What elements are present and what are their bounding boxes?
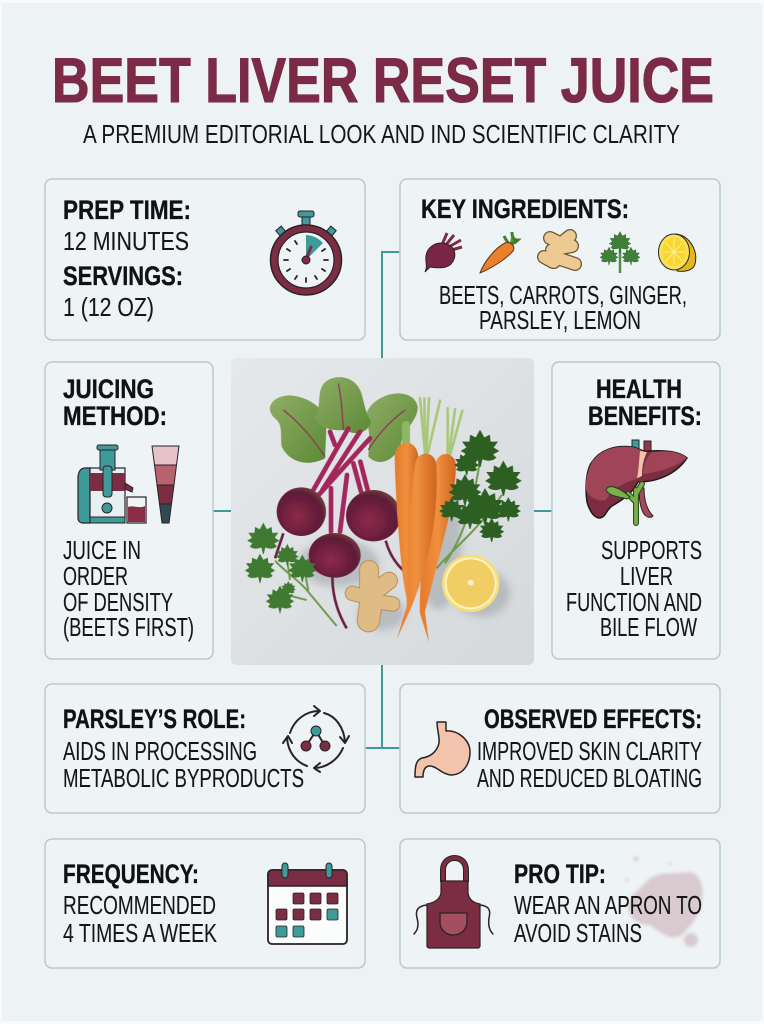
heading: key ingredients: KEY INGREDIENTS: — [421, 194, 629, 224]
ginger — [352, 570, 393, 621]
icon: stomach — [415, 722, 470, 777]
heading: parsley's role: PARSLEY’S ROLE: — [63, 704, 246, 734]
text: wear an apron: AVOID STAINS — [514, 918, 642, 948]
heading: servings: SERVINGS: — [63, 261, 183, 291]
icon: density cone — [152, 446, 179, 523]
text: supports liver function: LIVER — [620, 561, 673, 591]
text: 1 (12 oz): 1 (12 OZ) — [63, 292, 154, 322]
central ingredient photo — [231, 358, 534, 665]
text: recommended 4 times a week — [63, 890, 217, 948]
panel: health benefits — [552, 362, 720, 659]
panel: observed effects — [400, 684, 720, 813]
connector lines — [213, 252, 552, 748]
carrots — [395, 443, 456, 643]
panel: key ingredients — [400, 179, 720, 340]
icon: stopwatch — [270, 211, 342, 295]
beet stems — [312, 428, 370, 532]
text: wear an apron — [514, 890, 702, 948]
text: juice in order of density: (BEETS FIRST) — [63, 612, 194, 642]
right parsley — [437, 431, 520, 568]
text: 12 minutes: 12 MINUTES — [63, 226, 189, 256]
stain decoration — [626, 856, 702, 947]
panel: pro tip — [400, 839, 720, 968]
panel: frequency — [45, 839, 365, 968]
panel: parsley's role — [45, 684, 365, 813]
drop shadows — [298, 463, 510, 630]
panel: juicing method — [45, 362, 213, 659]
heading: juicing method: JUICING — [63, 374, 154, 404]
beets — [275, 487, 407, 628]
icon: calendar — [268, 863, 347, 944]
icon: carrot — [480, 232, 518, 273]
carrot tops — [406, 398, 462, 454]
heading: pro tip: PRO TIP: — [514, 859, 606, 889]
panel: prep time and servings — [45, 179, 365, 340]
text: recommended 4 times a week: 4 TIMES A WEEK — [63, 918, 217, 948]
heading: health benefits — [588, 374, 702, 431]
text: ingredients list — [439, 280, 687, 335]
heading: health benefits: HEALTH — [596, 374, 682, 404]
text: improved skin clarity — [477, 736, 702, 793]
text: supports liver function: FUNCTION AND — [566, 587, 702, 617]
heading: health benefits: BENEFITS: — [588, 401, 702, 431]
text: ingredients list: PARSLEY, LEMON — [479, 305, 641, 335]
icon: juicer and glass — [78, 445, 146, 523]
heading: frequency: FREQUENCY: — [63, 859, 199, 889]
text: juice in order of density: JUICE IN — [63, 535, 141, 565]
heading: prep time: PREP TIME: — [63, 195, 191, 225]
heading: juicing method — [63, 374, 167, 431]
icon: liver — [586, 440, 687, 523]
heading: juicing method: METHOD: — [63, 401, 167, 431]
text: supports liver function: SUPPORTS — [601, 535, 702, 565]
left parsley — [246, 524, 337, 626]
icon: parsley — [600, 232, 640, 273]
icon: lemon — [658, 234, 696, 271]
text: supports liver function — [566, 535, 702, 642]
icon: beet — [425, 233, 462, 272]
text: aids in processing — [63, 736, 304, 793]
text: supports liver function: BILE FLOW — [600, 612, 697, 642]
icon: metabolic cycle — [283, 706, 349, 772]
lemon — [442, 555, 499, 612]
icon: ginger — [544, 236, 575, 264]
icon: apron — [414, 858, 493, 948]
text: recommended 4 times a week: RECOMMENDED — [63, 890, 216, 920]
text: aids in processing: METABOLIC BYPRODUCTS — [63, 763, 304, 793]
text: juice in order of density — [63, 535, 194, 642]
text: aids in processing: AIDS IN PROCESSING — [63, 736, 257, 766]
beet greens — [270, 377, 418, 463]
text: juice in order of density: OF DENSITY — [63, 587, 173, 617]
text: juice in order of density: ORDER — [63, 561, 128, 591]
